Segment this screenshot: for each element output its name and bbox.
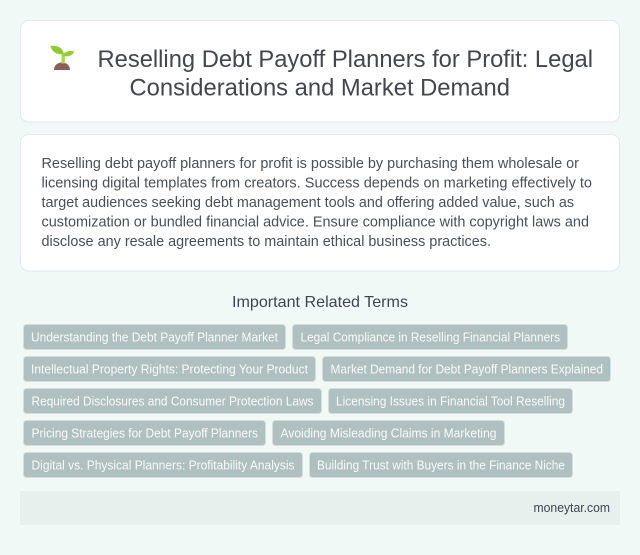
text block: summary: disclose any resale agreements to maintain ethical business practices.	[42, 233, 491, 250]
tag: Required Disclosures and Consumer Protection Laws	[32, 394, 314, 408]
heading: important related terms: Important Related Terms	[232, 294, 408, 311]
title	[98, 46, 593, 102]
text block: summary: customization or bundled financial advice. Ensure compliance with copyright laws and	[42, 214, 589, 230]
tag: Digital vs. Physical Planners: Profitability Analysis	[32, 458, 294, 472]
tag: Licensing Issues in Financial Tool Reselling	[336, 394, 565, 408]
tag: Market Demand for Debt Payoff Planners Explained	[330, 362, 603, 376]
tag	[272, 420, 504, 446]
tag	[310, 452, 572, 478]
tag: Intellectual Property Rights: Protecting Your Product	[31, 362, 308, 376]
title: Reselling Debt Payoff Planners for Profit: Legal	[98, 46, 593, 73]
panel: title header	[20, 20, 620, 122]
tag	[24, 356, 316, 382]
text block: summary	[42, 155, 592, 250]
tag	[24, 324, 286, 350]
footer	[20, 491, 620, 525]
tag	[328, 388, 572, 414]
text block: summary: licensing digital templates from creators. Success depends on marketing effectively to	[42, 174, 592, 192]
title: Considerations and Market Demand	[130, 74, 510, 102]
tag	[24, 452, 302, 478]
tag	[24, 388, 322, 414]
tag	[322, 356, 610, 382]
footer source text: moneytar.com	[534, 501, 610, 515]
tag: Avoiding Misleading Claims in Marketing	[280, 426, 496, 440]
tag: Legal Compliance in Reselling Financial Planners	[300, 330, 560, 344]
text block: summary: target audiences seeking debt management tools and offering added value, such as	[42, 194, 574, 211]
text block: summary: Reselling debt payoff planners for profit is possible by purchasing them wholesale or	[42, 155, 579, 172]
tag	[292, 324, 568, 350]
tag: Understanding the Debt Payoff Planner Market	[31, 330, 278, 344]
tag	[24, 420, 266, 446]
panel: summary paragraph	[20, 134, 620, 271]
panel: related term tags	[24, 324, 610, 478]
icon: sprout	[50, 46, 74, 70]
tag: Pricing Strategies for Debt Payoff Planners	[32, 426, 258, 440]
tag: Building Trust with Buyers in the Finance Niche	[317, 458, 565, 472]
